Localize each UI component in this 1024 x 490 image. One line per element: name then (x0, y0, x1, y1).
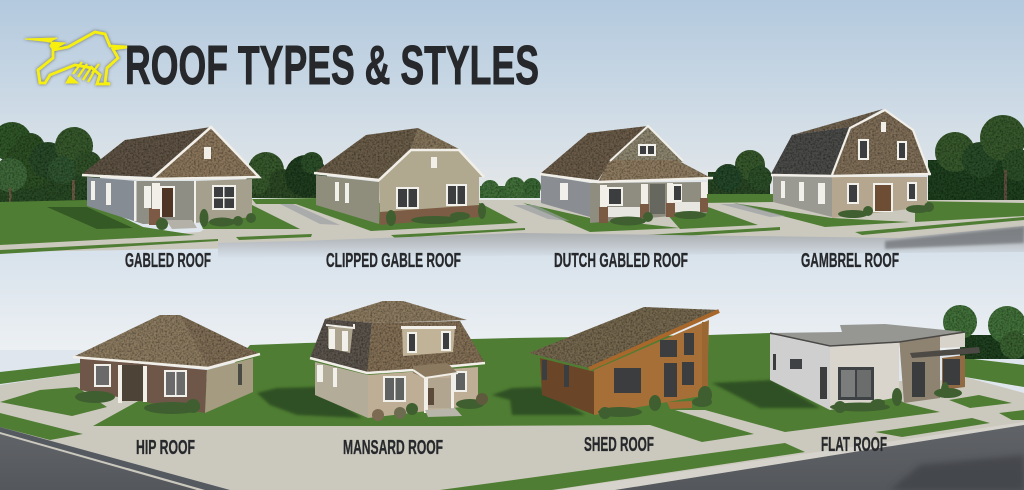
door (160, 186, 175, 217)
brick front wall (80, 358, 207, 413)
lawn gabled right (200, 205, 300, 229)
concrete driveways and walks (0, 200, 1024, 252)
right road (555, 422, 1024, 490)
house: clipped gable roof (314, 128, 486, 226)
small grass strip 1 (236, 234, 312, 240)
windows (91, 181, 236, 210)
vent (431, 157, 437, 168)
fascia (771, 174, 931, 176)
roof (73, 315, 208, 368)
road shadow (890, 455, 1024, 490)
left wall (316, 175, 379, 224)
front strip (0, 239, 218, 254)
roof (529, 307, 719, 368)
windows (317, 365, 467, 402)
windows (335, 182, 467, 209)
steps (667, 401, 692, 409)
door (650, 184, 665, 214)
left back grass (0, 363, 80, 384)
post (702, 322, 708, 395)
curb (0, 427, 230, 490)
house: gabled roof (82, 127, 259, 230)
roof trim (314, 150, 484, 180)
belly stripes (73, 62, 99, 82)
right small lawn (949, 395, 1012, 408)
left dormer (326, 324, 354, 353)
roof trim (540, 126, 713, 182)
shrubs (75, 391, 200, 414)
roof trim (589, 311, 719, 369)
left small lawn (0, 387, 107, 416)
windows (542, 333, 694, 397)
far right grass (999, 410, 1024, 420)
windows (94, 364, 242, 397)
front wall (832, 177, 927, 218)
front wall (195, 179, 252, 223)
label: dutch gabled roof: DUTCH GABLED ROOF (554, 250, 688, 272)
hoof (66, 76, 78, 83)
gable trim (832, 110, 930, 175)
ground: lower row (0, 333, 1024, 490)
ground: upper row (0, 194, 1024, 254)
upper roof (792, 109, 883, 135)
driveway shadows (280, 204, 340, 225)
label: hip roof: HIP ROOF (136, 437, 195, 459)
right dormer (401, 326, 456, 356)
small grass strip 3 (613, 227, 780, 240)
left wall (773, 176, 832, 217)
house: gambrel roof (771, 109, 934, 218)
upper gable (610, 126, 683, 162)
side wall (540, 358, 595, 415)
left road (0, 427, 230, 490)
right back lawn (965, 358, 1024, 387)
trees: upper row backdrop (0, 115, 1024, 204)
label: shed roof: SHED ROOF (584, 434, 654, 456)
front mansard (367, 321, 485, 373)
porch column (149, 183, 161, 225)
lawn gambrel (733, 203, 910, 227)
brick base (380, 205, 479, 225)
small grass strip 2 (391, 228, 525, 238)
house: shed roof (529, 307, 719, 419)
railings (607, 202, 700, 217)
road patch right (885, 227, 1024, 249)
canopy (910, 347, 980, 358)
porch recess (137, 181, 195, 224)
bull outline (38, 32, 127, 84)
steps (166, 220, 197, 229)
label: mansard roof: MANSARD ROOF (343, 437, 443, 459)
upper white section (940, 332, 965, 348)
road fade band: upper row (218, 226, 1024, 258)
title: ROOF TYPES & STYLES (125, 34, 539, 96)
middle strip lawn (875, 418, 990, 437)
shrubs (386, 203, 486, 226)
shrubs (610, 211, 706, 226)
label: gabled roof: GABLED ROOF (125, 250, 211, 272)
left lawn (0, 200, 195, 245)
bottom left grass (0, 413, 83, 440)
right wall (205, 358, 253, 413)
label: gambrel roof: GAMBREL ROOF (801, 250, 899, 272)
background sky: lower row (0, 245, 1024, 350)
house: flat roof (770, 324, 980, 413)
windows (560, 183, 682, 206)
lawn clipped gable (293, 203, 518, 231)
front wall (830, 342, 899, 410)
lawn right (915, 201, 1024, 222)
shrubs (830, 382, 962, 413)
logo: yellow bull (25, 32, 127, 84)
corner trim (134, 181, 196, 223)
porch (413, 363, 462, 417)
porch columns (599, 182, 708, 223)
gable trim (82, 127, 259, 179)
windows (781, 139, 917, 204)
lower dark roof (771, 127, 850, 175)
lawn dutch (523, 203, 680, 232)
shrubs (372, 393, 488, 421)
left mansard (310, 319, 372, 373)
roof (82, 127, 211, 177)
label: flat roof: FLAT ROOF (821, 434, 887, 456)
central big lawn (93, 333, 940, 442)
roof (314, 128, 418, 180)
house: dutch gabled roof (540, 126, 713, 226)
left wall (770, 334, 830, 410)
porch wall (590, 182, 707, 223)
stone section (899, 335, 940, 403)
background sky: upper row (0, 0, 1024, 215)
front wall (379, 150, 484, 225)
lightning tail (25, 38, 65, 50)
grass back strips (252, 198, 317, 204)
lawn shadows (257, 380, 820, 418)
left wall (541, 175, 590, 217)
main roof (540, 126, 648, 180)
fascia (73, 354, 260, 368)
shrubs (598, 386, 712, 419)
gable front (152, 127, 259, 178)
roof edge (770, 332, 965, 346)
fascia (310, 358, 485, 373)
roof right plane (180, 315, 260, 368)
bottom strip lawn (440, 443, 805, 490)
door (873, 183, 893, 212)
left wall (87, 177, 137, 222)
house: mansard roof (310, 301, 488, 421)
house: hip roof (73, 315, 260, 414)
shrubs (838, 202, 934, 218)
lower roof (598, 160, 713, 182)
lawn shadows: upper row (47, 207, 133, 229)
label: clipped gable roof: CLIPPED GABLE ROOF (326, 250, 461, 272)
roof (770, 324, 965, 346)
wood accent (942, 355, 965, 390)
windows (773, 354, 960, 400)
clipped hip (411, 128, 459, 149)
trees: lower row (943, 305, 1024, 359)
entry (118, 365, 147, 403)
vent (204, 147, 211, 159)
left wall (315, 362, 368, 418)
dormer window (638, 144, 656, 156)
front wall (368, 367, 478, 418)
front wall (594, 320, 709, 415)
lawn behind dutch (690, 194, 775, 203)
top roof (325, 301, 467, 323)
concrete base (0, 373, 1024, 490)
small grass strip 4 (855, 217, 1024, 235)
shrubs (156, 209, 256, 230)
vent (881, 122, 886, 132)
gambrel front (832, 110, 930, 175)
